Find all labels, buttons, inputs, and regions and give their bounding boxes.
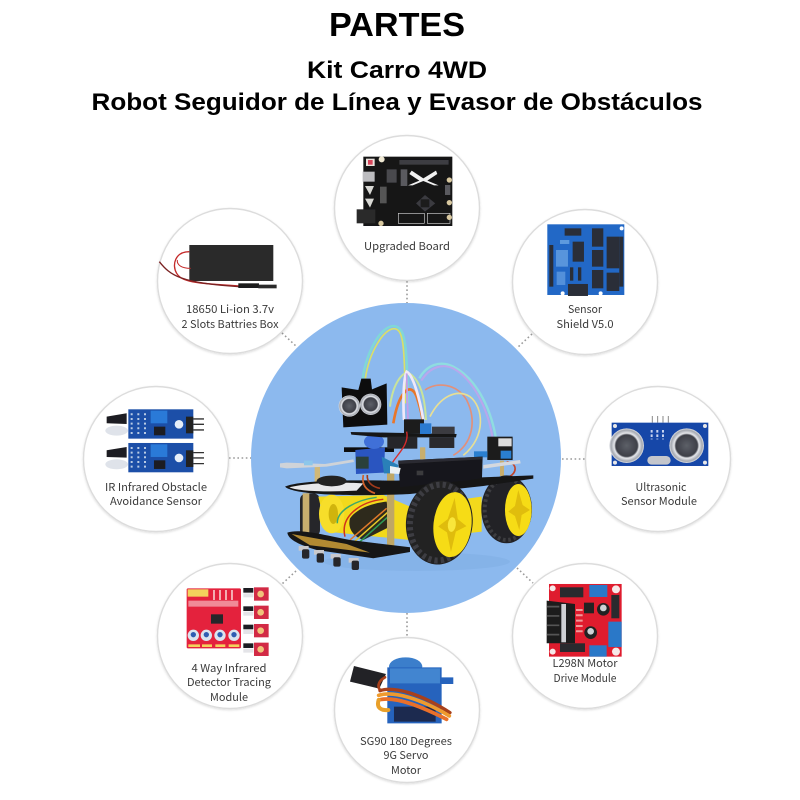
ribbon wires — [337, 497, 390, 545]
label — [105, 479, 207, 509]
label: L298N Motor — [552, 655, 618, 671]
line sensors — [299, 546, 359, 570]
side sensor strip — [280, 459, 354, 468]
icon: L298N board — [547, 584, 622, 657]
panel: upgraded board — [334, 136, 480, 280]
label — [187, 660, 272, 705]
label: Drive Module — [554, 670, 616, 686]
main plate — [285, 475, 533, 495]
icon: tracing module — [187, 587, 269, 656]
icon: sensor shield board — [547, 224, 624, 296]
panel: servo — [334, 638, 480, 782]
panel: L298N driver — [512, 564, 658, 708]
rear right standoff and small board — [487, 437, 513, 460]
subtitle — [92, 57, 702, 116]
label: Ultrasonic — [636, 479, 687, 495]
label: Upgraded Board — [364, 238, 450, 254]
icon: battery holder — [159, 245, 277, 288]
label: Motor — [391, 762, 422, 778]
bottom plate — [287, 531, 410, 558]
servo — [344, 447, 394, 452]
label — [556, 301, 614, 332]
ground shadow — [323, 552, 510, 571]
panel: 4 way infrared — [158, 564, 302, 708]
panel: ultrasonic sensor — [586, 386, 730, 532]
icon: SG90 servo — [350, 657, 453, 723]
top plate with controller — [351, 432, 457, 437]
label: Sensor — [568, 301, 603, 317]
panel: IR obstacle sensor — [84, 386, 228, 532]
label — [182, 301, 279, 332]
subtitle: Robot Seguidor de Línea y Evasor de Obstáculos — [92, 89, 702, 116]
yellow motors and rear left wheel — [300, 493, 320, 537]
panel: battery box — [158, 208, 302, 354]
icon: IR sensor boards — [105, 409, 204, 472]
subtitle: Kit Carro 4WD — [307, 57, 487, 84]
label — [621, 479, 697, 509]
label: Avoidance Sensor — [110, 493, 203, 509]
label: SG90 180 Degrees — [360, 733, 452, 749]
panel: sensor shield — [512, 210, 658, 354]
label: 18650 Li-ion 3.7v — [186, 301, 274, 317]
ultrasonic head — [342, 379, 387, 427]
rear wheel — [481, 475, 532, 543]
standoffs — [303, 493, 309, 537]
label — [360, 733, 452, 778]
label: 4 Way Infrared — [192, 660, 266, 676]
label: Detector Tracing — [187, 674, 272, 690]
wires — [363, 326, 496, 455]
label: 9G Servo — [384, 747, 429, 763]
label: Shield V5.0 — [556, 316, 614, 332]
title: PARTES — [329, 6, 465, 43]
icon: ultrasonic module — [609, 416, 708, 466]
central blue circle — [251, 303, 561, 613]
dotted connectors — [229, 281, 585, 637]
black battery box — [398, 457, 483, 487]
robot car — [280, 326, 533, 571]
label — [552, 655, 618, 686]
label: IR Infrared Obstacle — [105, 479, 207, 495]
label: Sensor Module — [621, 493, 697, 509]
red wires — [388, 432, 407, 470]
front wheel — [402, 477, 477, 568]
icon: controller board — [357, 156, 452, 226]
label: 2 Slots Battries Box — [182, 316, 279, 332]
label: Module — [210, 689, 248, 705]
